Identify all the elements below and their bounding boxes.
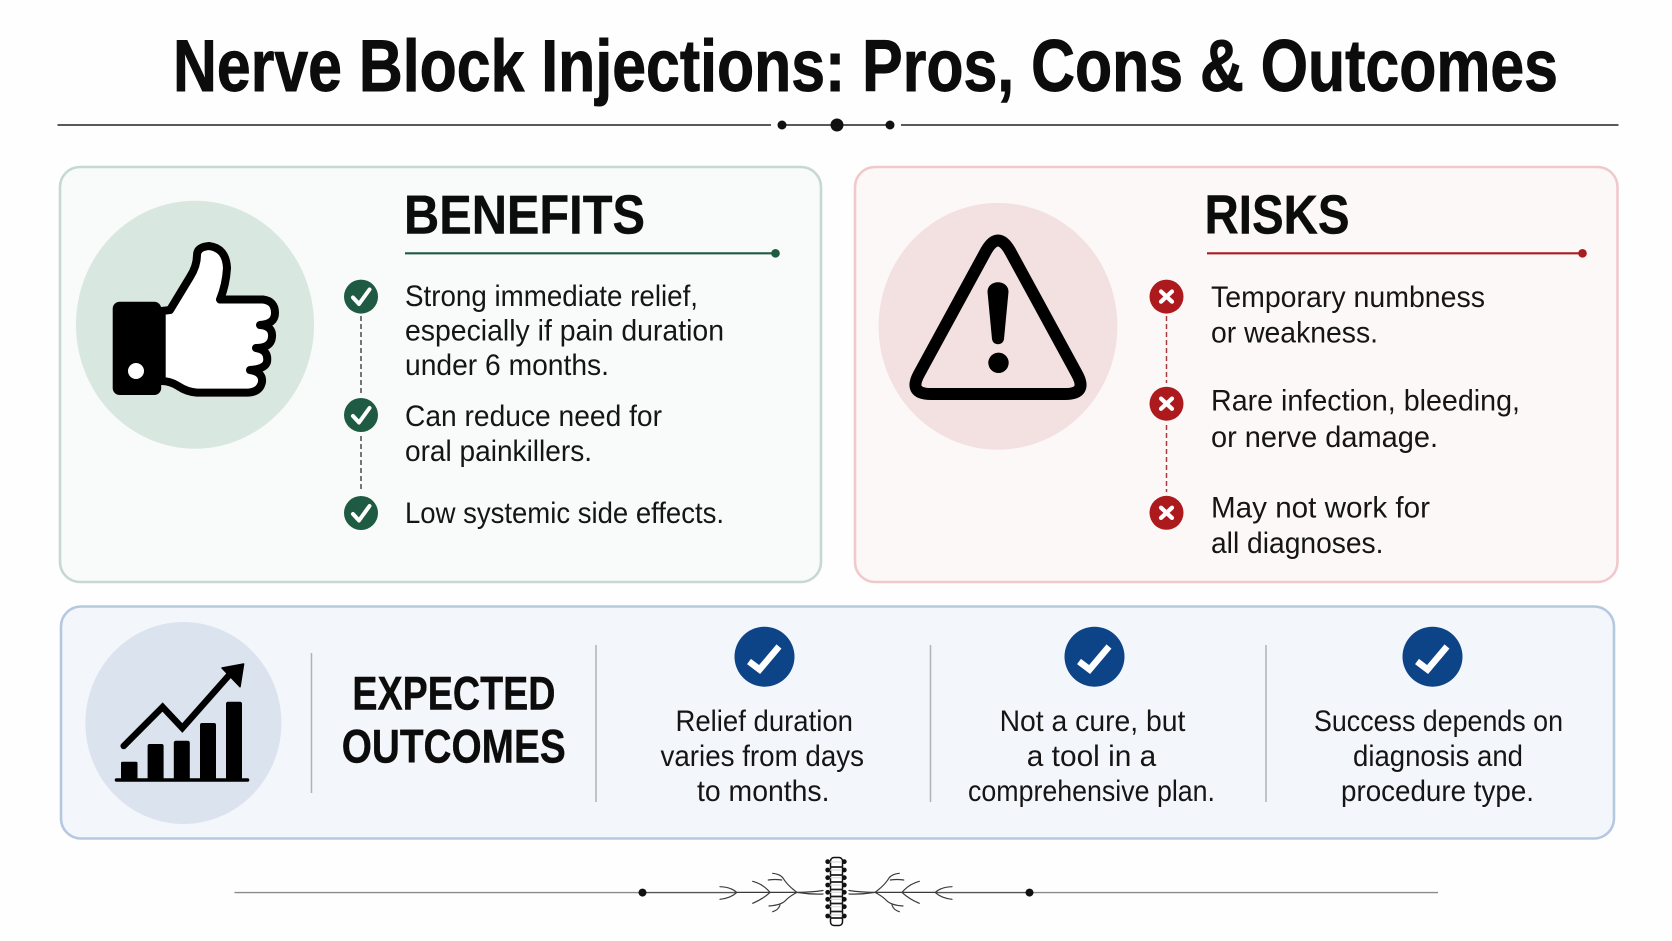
outcome text: varies from days bbox=[660, 740, 864, 773]
outcome text: comprehensive plan. bbox=[968, 775, 1215, 808]
icon: green check 1 bbox=[344, 280, 378, 314]
heading underline bbox=[1207, 249, 1587, 258]
nerve branches right bbox=[849, 873, 952, 912]
heading: risks: RISKS bbox=[1204, 184, 1350, 246]
icon: red cross 1 bbox=[1150, 280, 1184, 314]
icon: warning triangle bbox=[879, 203, 1117, 450]
heading underline bbox=[405, 249, 780, 258]
benefit text 3: Low systemic side effects. bbox=[405, 497, 724, 530]
risk text 3: all diagnoses. bbox=[1211, 527, 1384, 560]
benefit text 1: Strong immediate relief, bbox=[405, 280, 698, 313]
outcome 3 bbox=[1314, 627, 1563, 808]
risk text 3 bbox=[1211, 491, 1430, 560]
benefit text 1 bbox=[405, 280, 724, 382]
outcomes card background bbox=[61, 606, 1614, 838]
risk text 2 bbox=[1211, 385, 1520, 454]
risk text 1 bbox=[1211, 281, 1485, 350]
outcome text bbox=[660, 705, 864, 808]
icon: red cross 2 bbox=[1150, 387, 1184, 421]
benefit connector lines bbox=[360, 316, 362, 492]
risk text 1: or weakness. bbox=[1211, 316, 1378, 350]
benefit text 2: Can reduce need for bbox=[405, 400, 662, 433]
footer line right bbox=[935, 889, 1438, 897]
outcome text: Not a cure, but bbox=[1000, 705, 1185, 738]
heading: expected outcomes: OUTCOMES bbox=[342, 720, 566, 772]
benefit text 1: especially if pain duration bbox=[405, 315, 724, 348]
outcome text: Success depends on bbox=[1314, 705, 1563, 738]
risk text 3: May not work for bbox=[1211, 491, 1430, 524]
outcome text: procedure type. bbox=[1341, 775, 1534, 808]
icon: blue check bbox=[1402, 627, 1462, 687]
benefit text 2 bbox=[405, 400, 662, 468]
icon: rising bar chart bbox=[85, 622, 281, 824]
outcome text bbox=[1314, 705, 1563, 808]
icon: thumbs up bbox=[76, 201, 314, 449]
icon: green check 3 bbox=[344, 496, 378, 530]
outcome 1 bbox=[660, 627, 864, 808]
outcome text: Relief duration bbox=[676, 705, 853, 738]
icon: red cross 3 bbox=[1150, 496, 1184, 530]
heading: expected outcomes: EXPECTED bbox=[352, 666, 555, 720]
icon: blue check bbox=[1064, 627, 1124, 687]
heading: expected outcomes bbox=[342, 666, 566, 772]
panel: expected outcomes bbox=[61, 606, 1614, 838]
icon: blue check bbox=[734, 627, 794, 687]
benefit text 1: under 6 months. bbox=[405, 349, 609, 382]
icon: spine bbox=[825, 858, 847, 926]
footer line left bbox=[234, 889, 737, 897]
benefit text 2: oral painkillers. bbox=[405, 435, 592, 468]
outcome text: a tool in a bbox=[1027, 740, 1157, 773]
risk connector lines bbox=[1166, 316, 1168, 492]
icon: green check 2 bbox=[344, 398, 378, 432]
footer ornament: spine and nerves bbox=[234, 858, 1438, 926]
benefits card background bbox=[60, 167, 821, 582]
risk text 2: or nerve damage. bbox=[1211, 421, 1438, 454]
column dividers bbox=[312, 645, 1266, 802]
panel: benefits bbox=[60, 167, 821, 582]
risk text 2: Rare infection, bleeding, bbox=[1211, 385, 1520, 418]
outcome text: to months. bbox=[697, 775, 830, 808]
outcome text bbox=[968, 705, 1215, 808]
outcome 2 bbox=[968, 627, 1215, 808]
risk text 1: Temporary numbness bbox=[1211, 281, 1485, 314]
heading: benefits: BENEFITS bbox=[404, 184, 645, 246]
risks card background bbox=[855, 167, 1618, 582]
panel: risks bbox=[855, 167, 1618, 582]
nerve branches left bbox=[720, 873, 823, 912]
title divider ornament bbox=[58, 118, 1618, 132]
outcome text: diagnosis and bbox=[1353, 740, 1523, 773]
